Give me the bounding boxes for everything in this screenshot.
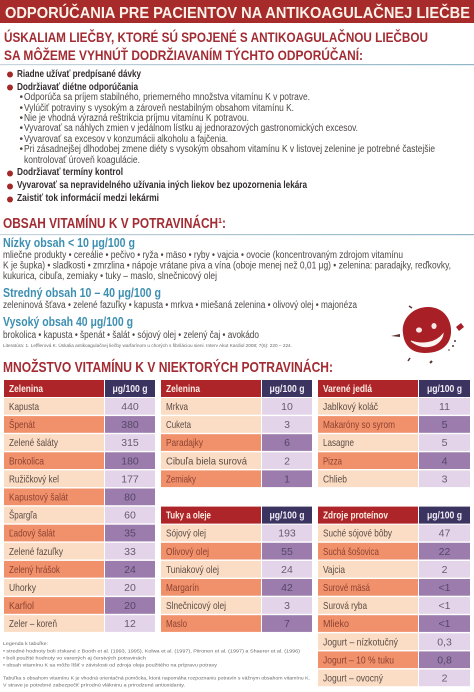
table: vegetables: 177 (121, 473, 139, 485)
table: vegetables: 35 (124, 528, 136, 540)
table: fats and oils: Margarín (166, 582, 199, 594)
table: cooked meals (318, 380, 470, 487)
table: fats and oils: 24 (281, 564, 293, 576)
table: protein sources: Zdroje proteínov (323, 511, 388, 522)
table: vegetables 2: 6 (284, 437, 290, 449)
table: protein sources: Jogurt – 10 % tuku (323, 654, 394, 666)
table: vegetables: Špargľa (9, 509, 37, 522)
table: protein sources: Mlieko (323, 618, 349, 630)
table: vegetables 2: 10 (281, 401, 293, 413)
table legend: Legenda k tabuľke: (3, 641, 48, 646)
table: vegetables: Zeler – koreň (9, 618, 57, 630)
table: vegetables: Špenát (9, 418, 35, 431)
table: fats and oils: 3 (284, 600, 290, 612)
table: protein sources: Surové mäsá (323, 582, 370, 594)
table: protein sources: Jogurt – ovocný (323, 672, 384, 684)
table: cooked meals: 5 (442, 419, 448, 431)
table: vegetables: Kapusta (9, 401, 39, 413)
table: vegetables: 24 (124, 564, 136, 576)
low content block: Nízky obsah < 10 μg/100 g (3, 235, 135, 250)
table: fats and oils: 193 (278, 528, 296, 540)
table: vegetables 2: Mrkva (166, 401, 188, 413)
table: protein sources: <1 (439, 600, 451, 612)
table note (3, 676, 310, 688)
table: vegetables: 315 (121, 437, 139, 449)
table: cooked meals: Jablkový koláč (323, 401, 378, 413)
table: protein sources: 2 (442, 672, 448, 684)
table: vegetables 2: Paradajky (166, 437, 204, 449)
table: protein sources: Suché sójové bôby (323, 528, 393, 540)
high content block (3, 314, 259, 341)
subtitle heading: SA MÔŽEME VYHNÚŤ DODRŽIAVANÍM TÝCHTO ODPORÚČANÍ: (4, 46, 363, 63)
table: vegetables: 20 (124, 582, 136, 594)
table legend: • obsah vitamínu K sa môže líšiť v závislosti od zdroja oleja použitého na prípravu potravy (3, 662, 218, 668)
bullet: diet with sub-items: Dodržiavať diétne odporúčania (17, 82, 138, 93)
heading: vitamin K amounts: MNOŽSTVO VITAMÍNU K V NIEKTORÝCH POTRAVINÁCH: (3, 358, 333, 376)
table note: Tabuľka s obsahom vitamínu K je vhodná orientačná pomôcka, ktorá napomáha rozpoznaniu potravín s vážnym obsahom vitamínu K. (3, 676, 310, 680)
table: fats and oils: 42 (281, 582, 293, 594)
bullet: diet with sub-items: • (20, 103, 24, 114)
table: protein sources: 47 (439, 528, 450, 540)
table: protein sources: Surová ryba (323, 600, 367, 612)
table: cooked meals: Lasagne (323, 437, 354, 449)
table: protein sources: 2 (442, 564, 448, 576)
table: fats and oils (161, 507, 312, 632)
table: vegetables (4, 380, 155, 632)
table: vegetables: Zelený hrášok (9, 564, 61, 576)
table: cooked meals: Makaróny so syrom (323, 419, 395, 431)
table: vegetables: 33 (124, 546, 136, 558)
low content block (3, 235, 451, 282)
table: cooked meals: 4 (442, 455, 448, 467)
high content block: brokolica • kapusta • špenát • šalát • sójový olej • zelený čaj • avokádo (3, 330, 259, 341)
table: vegetables: Ľadový šalát (9, 528, 55, 540)
table: vegetables: 60 (124, 510, 136, 522)
bullet: diet with sub-items: Vylúčiť potraviny s vysokým a zároveň nestabilným obsahom vitamínu K. (24, 103, 294, 114)
bullet: diet with sub-items (7, 82, 435, 166)
icon: smiling red mascot (391, 306, 464, 363)
table: vegetables: 180 (121, 455, 139, 467)
bullet: diet with sub-items: Vyvarovať sa excesov v konzumácii alkoholu a fajčenia. (24, 134, 228, 145)
bullet: diet with sub-items: Nie je vhodná výrazná reštrikcia príjmu vitamínu K potravou. (24, 113, 249, 124)
table: protein sources: 0,3 (437, 636, 452, 648)
table: vegetables 2: Zelenina (166, 384, 200, 395)
table: protein sources: μg/100 g (427, 511, 462, 522)
table: cooked meals: 5 (442, 437, 448, 449)
table: cooked meals: Pizza (323, 455, 342, 467)
table: vegetables: 20 (124, 600, 136, 612)
table: protein sources: <1 (439, 618, 451, 630)
bullet: information flow: Zaistiť tok informácií medzi lekármi (17, 193, 159, 204)
bullet: diet with sub-items: kontrolovať úroveň koagulácie. (24, 155, 140, 166)
table: vegetables: 80 (124, 492, 136, 504)
table: fats and oils: Slnečnicový olej (166, 600, 226, 612)
table: protein sources: Vajcia (323, 564, 345, 576)
recommendations list (7, 69, 435, 204)
bullet: diet with sub-items: Vyvarovať sa náhlych zmien v jedálnom lístku aj jednorazových gastronomických excesov. (24, 123, 358, 134)
table legend: • boli použité hodnoty vo varených aj čerstvých potravinách (3, 656, 147, 660)
table: vegetables 2: Zemiaky (166, 473, 197, 485)
table: vegetables: 12 (124, 618, 136, 630)
table: vegetables 2 (161, 380, 312, 487)
bullet: dose: Riadne užívať predpísané dávky (17, 69, 141, 80)
table: protein sources: 22 (439, 546, 450, 558)
table: fats and oils: 55 (281, 546, 293, 558)
table legend (3, 641, 301, 668)
table: cooked meals: 11 (439, 401, 450, 413)
low content block: kukurica, cibuľa, zemiaky • tuky – maslo, slnečnicový olej (3, 271, 217, 282)
bullet: diet with sub-items: • (20, 134, 24, 145)
subtitle heading (4, 28, 428, 63)
table: vegetables: Ružičkový kel (9, 473, 59, 485)
table: vegetables: 440 (121, 401, 139, 413)
table: cooked meals: Chlieb (323, 473, 347, 485)
medium content block (3, 285, 357, 311)
table: fats and oils: μg/100 g (270, 511, 304, 522)
table: vegetables 2: 1 (284, 473, 290, 485)
table legend: • stredné hodnoty boli získané z Booth et al. (1993, 1995), Kolwa et al. (1997), Piironen et al. (1997) a Shaerer et al. (1996) (3, 648, 301, 654)
table: vegetables 2: 2 (284, 455, 290, 467)
table: vegetables: Karfiol (9, 600, 34, 612)
table: vegetables 2: Cibuľa biela surová (166, 455, 247, 467)
table note: V strave je potrebné zabezpečiť prírodnú vlákninu a prirodzené antioxidanty. (3, 682, 185, 688)
table: fats and oils: Tuky a oleje (166, 511, 211, 522)
bullet: diet with sub-items: • (20, 113, 24, 124)
table: fats and oils: 7 (284, 618, 290, 630)
table: cooked meals: Varené jedlá (323, 384, 372, 395)
table: vegetables: Zelenina (9, 384, 43, 395)
bullet: other medicines: Vyvarovať sa nepravidelného užívania iných liekov bez upozornenia lekára (17, 180, 307, 191)
table: fats and oils: Maslo (166, 618, 187, 630)
bullet: diet with sub-items: • (20, 123, 24, 134)
table: vegetables: Uhorky (9, 582, 37, 594)
bullet: diet with sub-items: • (20, 92, 24, 103)
table: vegetables: μg/100 g (112, 384, 148, 395)
medium content block: Stredný obsah 10 – 40 μg/100 g (3, 285, 161, 300)
table: vegetables: Brokolica (9, 455, 44, 467)
table: fats and oils: Tuniakový olej (166, 564, 219, 576)
table: vegetables: Zelené fazuľky (9, 546, 64, 558)
table: cooked meals: 3 (442, 473, 448, 485)
table: fats and oils: Sójový olej (166, 528, 206, 540)
table: protein sources (318, 507, 470, 686)
table: vegetables 2: μg/100 g (270, 384, 304, 395)
low content block: mliečne produkty • cereálie • pečivo • ryža • mäso • ryby • vajcia • ovocie (koncentrovaným zdrojom vitamínu (3, 250, 403, 261)
high content block: Vysoký obsah 40 μg/100 g (3, 314, 133, 329)
table: protein sources: 0,8 (437, 654, 452, 666)
table: protein sources: Jogurt – nízkotučný (323, 636, 399, 648)
table: protein sources: Suchá šošovica (323, 546, 379, 558)
table: vegetables 2: Cuketa (166, 419, 191, 431)
table: fats and oils: Olivový olej (166, 546, 209, 558)
bullet: check-ups: Dodržiavať termíny kontrol (17, 167, 123, 178)
table: vegetables: 380 (121, 419, 139, 431)
bullet: diet with sub-items: • (20, 144, 24, 155)
table: vegetables: Zelené šaláty (9, 437, 59, 449)
literature note: Literatúra: 1. Lefflerová K. Úskalia antikoagulačnej liečby warfarínom u chorých s fibriláciou sieni. Interv Akut Kardiol 2008; 7(6): 220 – 224. (3, 342, 292, 348)
table: vegetables: Kapustový šalát (9, 492, 68, 504)
table: vegetables 2: 3 (284, 419, 290, 431)
table: cooked meals: μg/100 g (427, 384, 462, 395)
table: protein sources: <1 (439, 582, 451, 594)
heading: vitamin K content: OBSAH VITAMÍNU K V POTRAVINÁCH¹: (3, 215, 226, 232)
bullet: diet with sub-items: Odporúča sa príjem stabilného, priemerného množstva vitamínu K v potrave. (24, 92, 310, 103)
medium content block: zeleninová šťava • zelené fazuľky • kapusta • mrkva • miešaná zelenina • olivový olej • majonéza (3, 300, 357, 311)
